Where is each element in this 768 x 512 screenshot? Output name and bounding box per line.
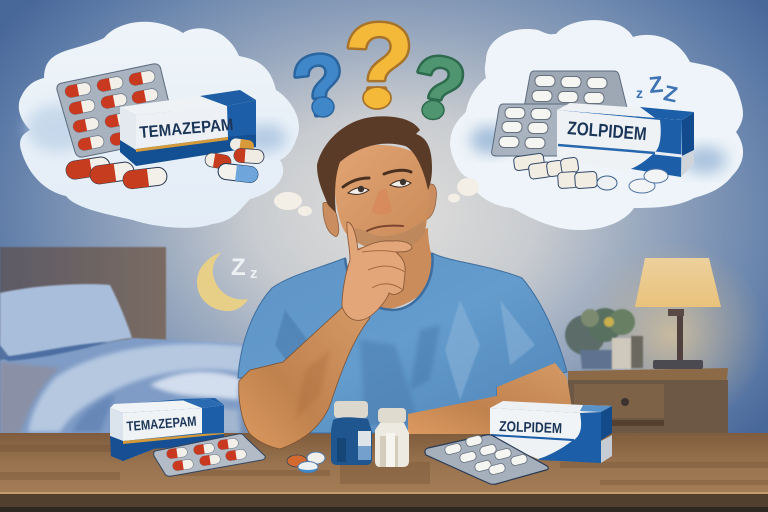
hand <box>342 222 412 320</box>
table blister zolpidem <box>425 435 548 484</box>
thought cloud left <box>19 22 312 228</box>
question mark green: ? <box>405 37 472 139</box>
neck <box>352 228 440 310</box>
left arm <box>239 305 370 449</box>
icon: crescent moon <box>197 252 248 311</box>
medicine box zolpidem <box>557 103 694 177</box>
box label: ZOLPIDEM <box>567 118 647 145</box>
blister pack front <box>492 104 575 156</box>
question mark yellow: ? <box>344 0 414 129</box>
nose <box>372 188 392 215</box>
cloud shading <box>470 126 510 154</box>
table edge <box>0 492 768 494</box>
table blister temazepam <box>154 434 265 476</box>
box label: TEMAZEPAM <box>139 116 234 142</box>
nightstand <box>568 368 728 434</box>
hair <box>317 116 432 213</box>
tail bubble small <box>448 194 460 202</box>
icon: zzz: Z <box>662 80 680 107</box>
cloud shape <box>450 20 743 230</box>
eye left <box>348 188 369 194</box>
blanket <box>0 338 248 434</box>
right arm <box>408 363 575 434</box>
plant <box>565 308 643 369</box>
ear left <box>323 202 339 237</box>
zzz text: Z <box>231 254 246 281</box>
table box zolpidem <box>490 401 612 463</box>
loose capsules <box>65 138 264 190</box>
thought cloud right <box>448 20 743 230</box>
pill bottle blue <box>331 401 372 465</box>
question marks <box>286 0 472 139</box>
lamp glow <box>577 240 767 430</box>
box label: TEMAZEPAM <box>126 414 197 434</box>
shirt <box>238 253 567 433</box>
tail bubble small <box>298 206 312 216</box>
table box temazepam <box>110 398 224 461</box>
cloud shading <box>26 104 90 152</box>
face <box>334 145 430 252</box>
pill bottle white <box>375 408 409 467</box>
loose tablets <box>513 153 668 193</box>
man <box>238 116 575 449</box>
stubble <box>348 220 425 253</box>
table <box>0 433 768 512</box>
question mark blue: ? <box>286 35 353 137</box>
icon: zzz: Z <box>648 71 664 98</box>
bed <box>0 247 248 434</box>
headboard <box>0 247 166 340</box>
table top <box>0 433 768 492</box>
brow left <box>343 178 369 187</box>
icon: zzz: z <box>636 85 643 101</box>
ear right <box>424 184 437 220</box>
icon: zzz <box>636 71 680 107</box>
blister pack back <box>524 71 627 108</box>
blister pack <box>57 64 176 157</box>
zzz text: z <box>250 265 258 282</box>
tail bubble large <box>274 192 302 210</box>
medicine box temazepam <box>120 90 256 166</box>
mouth <box>367 226 403 231</box>
eye right <box>390 180 411 187</box>
loose pills on table <box>287 452 325 473</box>
tail bubble large <box>457 178 479 196</box>
box label: ZOLPIDEM <box>499 418 562 436</box>
pillow <box>0 284 132 358</box>
lamp <box>635 258 721 369</box>
brow right <box>384 170 411 174</box>
cloud shape <box>19 22 299 228</box>
head <box>317 116 437 253</box>
moon and zzz <box>197 252 258 311</box>
zzz text <box>231 254 258 282</box>
nightstand and lamp <box>565 258 728 434</box>
